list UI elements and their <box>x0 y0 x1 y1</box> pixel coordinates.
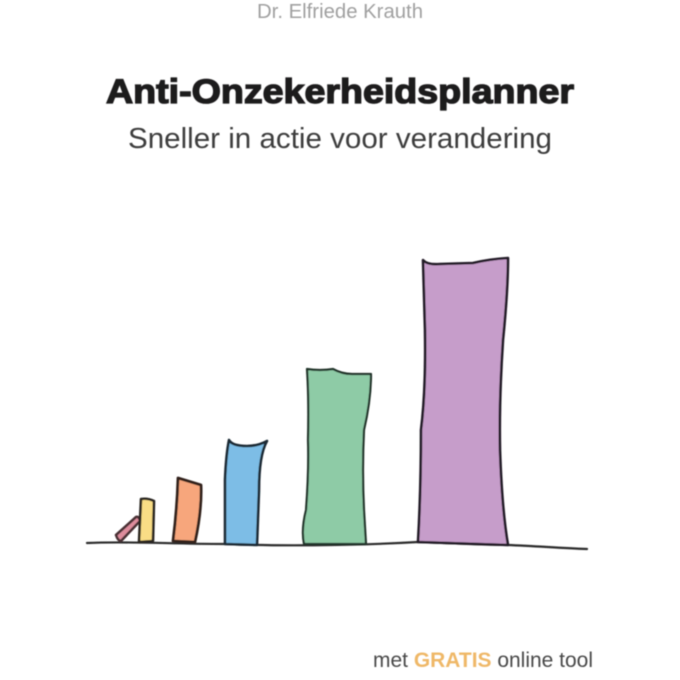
author name: Dr. Elfriede Krauth <box>257 1 423 23</box>
bar: orange <box>173 478 201 542</box>
bar: yellow <box>139 499 154 542</box>
title: Anti-Onzekerheidsplanner <box>106 73 574 111</box>
bar chart: growing hand-drawn bars <box>87 258 587 549</box>
bar: blue <box>225 440 267 545</box>
bar: fallen pink block <box>116 517 140 541</box>
bar: green <box>303 369 371 544</box>
baseline <box>87 542 587 549</box>
subtitle: Sneller in actie voor verandering <box>128 123 552 155</box>
bottom tagline: met GRATIS online tool <box>373 648 593 672</box>
bar: purple <box>418 258 508 545</box>
